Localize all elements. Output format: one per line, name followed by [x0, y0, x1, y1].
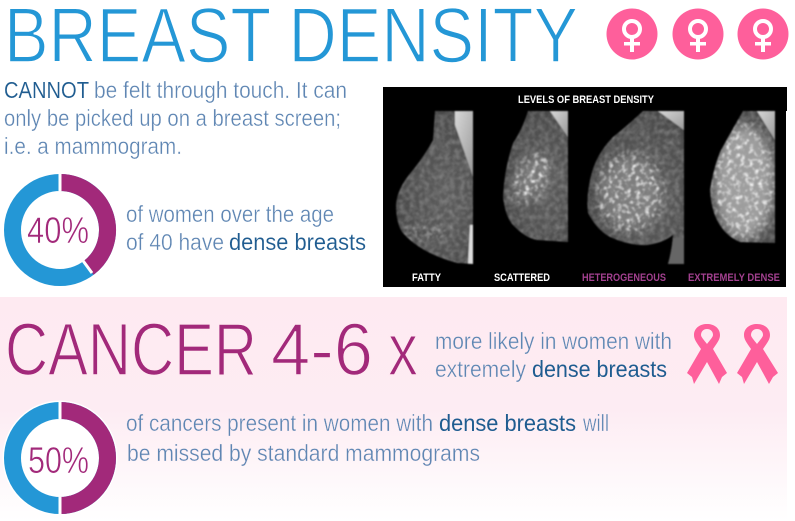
text block: cannot be felt: be felt through touch. It can [94, 77, 347, 103]
text block: more likely: dense breasts [532, 356, 667, 382]
mammogram: extremely dense [709, 110, 776, 244]
text block: cannot be felt: only be picked up on a breast screen; [4, 105, 341, 131]
icons: pink ribbons [687, 324, 778, 384]
text block: cannot be felt: i.e. a mammogram. [4, 133, 182, 159]
panel: levels of breast density image [383, 87, 787, 287]
text block: 50% of cancers: be missed by standard mammograms [127, 440, 480, 466]
text block: 40% of women: of 40 have [126, 229, 224, 255]
text block: 50% of cancers: of cancers present in women with [126, 410, 433, 436]
text block: 50% of cancers [126, 410, 609, 466]
text block: more likely: extremely [435, 356, 526, 382]
icon: ribbon 1 [687, 324, 727, 384]
label: heterogeneous: HETEROGENEOUS [582, 272, 666, 284]
text block: 40% of women: dense breasts [229, 229, 366, 255]
text block: cannot be felt: CANNOT [4, 77, 89, 103]
mammogram: fatty [395, 110, 474, 265]
donut chart: 40%: 40% [27, 210, 89, 251]
label: scattered: SCATTERED [494, 272, 550, 284]
donut chart: 50%: 50% [28, 440, 89, 481]
text block: 40% of women [126, 201, 366, 255]
text block: 50% of cancers: will [582, 410, 609, 436]
label: extremely dense: EXTREMELY DENSE [688, 272, 780, 284]
mammogram: scattered [502, 110, 569, 243]
text block: cannot be felt [4, 77, 347, 159]
heading: cancer 4-6 x: CANCER [5, 308, 257, 391]
donut chart: 40% [12, 173, 108, 278]
icon: female symbol 3 [738, 8, 788, 60]
text block: 40% of women: of women over the age [126, 201, 334, 227]
icon: female symbol 1 [606, 8, 658, 60]
heading: cancer 4-6 x: 4-6 [271, 308, 373, 391]
icon: ribbon 2 [737, 324, 778, 384]
label: fatty: FATTY [412, 272, 442, 284]
icons: female symbols [606, 8, 788, 60]
icon: female symbol 2 [672, 8, 724, 60]
pink lower panel [0, 297, 787, 521]
text block: 50% of cancers: dense breasts [439, 410, 576, 436]
heading: levels of breast density: LEVELS OF BREAST DENSITY [518, 94, 655, 106]
mammogram: heterogeneous [582, 108, 687, 268]
donut chart: 50% [2, 400, 118, 516]
heading: cancer 4-6 x: x [388, 308, 418, 391]
text block: more likely: more likely in women with [435, 328, 672, 354]
text block: more likely [435, 328, 672, 382]
